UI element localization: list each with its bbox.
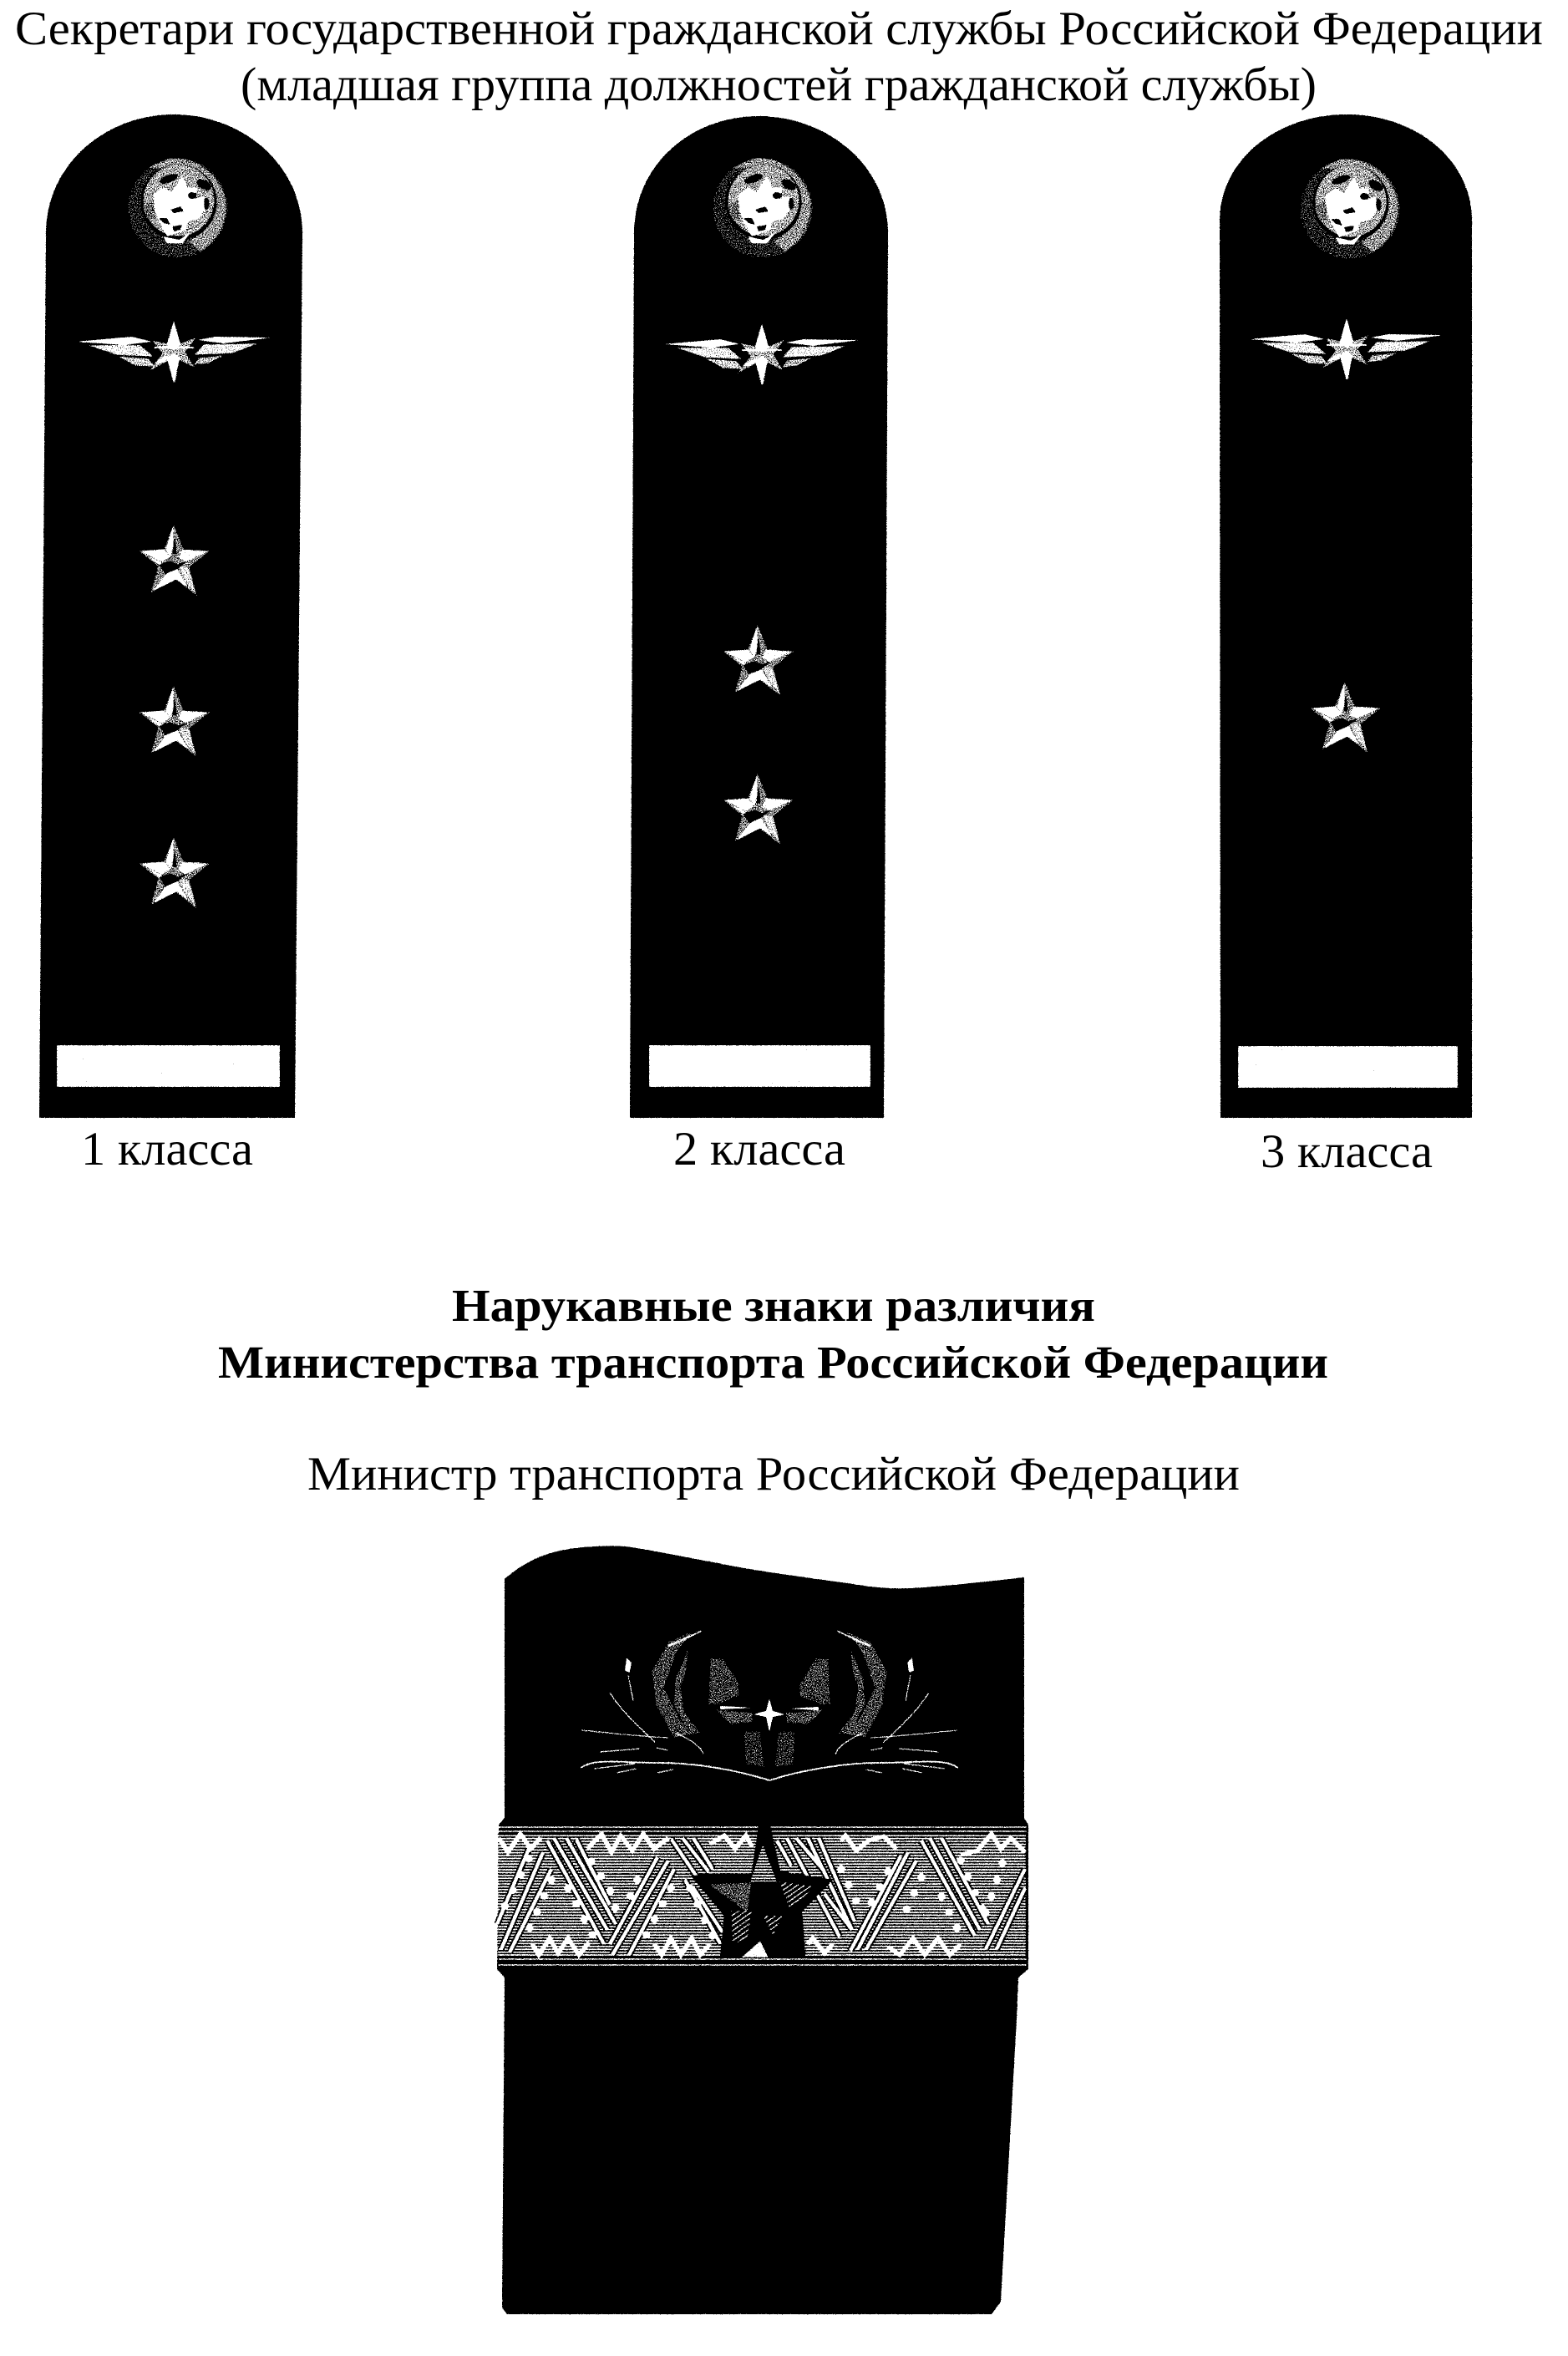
label: 1st class: 1 класса [81,1123,253,1175]
icon: winged star [74,320,273,385]
zigzag trim [499,1834,1025,1955]
panel: shoulder board 1st class [39,114,302,1118]
icon: star 2 [138,685,211,758]
star on band [691,1826,833,1958]
heading: sleeve insignia: Нарукавные знаки различия [452,1280,1095,1331]
icon: star 1 [722,624,794,697]
title: civil service secretaries: (младшая группа должностей гражданской службы) [241,58,1317,111]
title: civil service secretaries [15,3,1543,111]
emblem: wreath with central star [581,1631,958,1780]
silver bar [57,1045,280,1087]
icon: star 2 [722,773,794,845]
title: civil service secretaries: Секретари государственной гражданской службы Российской Федерации [15,3,1543,55]
icon: coat of arms emblem [128,158,228,258]
label: 2nd class: 2 класса [673,1123,845,1175]
braided galloon band [497,1827,1027,1965]
diagonal chevrons [497,1838,1025,1955]
icon: coat of arms emblem [713,158,813,258]
silver bar [649,1045,870,1087]
icon: winged star [662,322,861,388]
icon: star 1 [138,524,211,597]
heading: sleeve insignia [218,1280,1328,1388]
icon: star [1309,681,1382,754]
panel: minister sleeve insignia [497,1546,1028,2314]
label: 3rd class: 3 класса [1261,1125,1433,1178]
silver bar [1238,1046,1458,1088]
heading: sleeve insignia: Министерства транспорта Российской Федерации [218,1337,1328,1388]
central winged star [720,1698,819,1732]
icon: winged star [1247,317,1446,383]
icon: coat of arms emblem [1300,159,1400,259]
panel: shoulder board 2nd class [630,116,888,1118]
panel: shoulder board 3rd class [1220,114,1472,1118]
subheading: minister of transport: Министр транспорта Российской Федерации [307,1448,1240,1500]
icon: star 3 [138,836,211,909]
